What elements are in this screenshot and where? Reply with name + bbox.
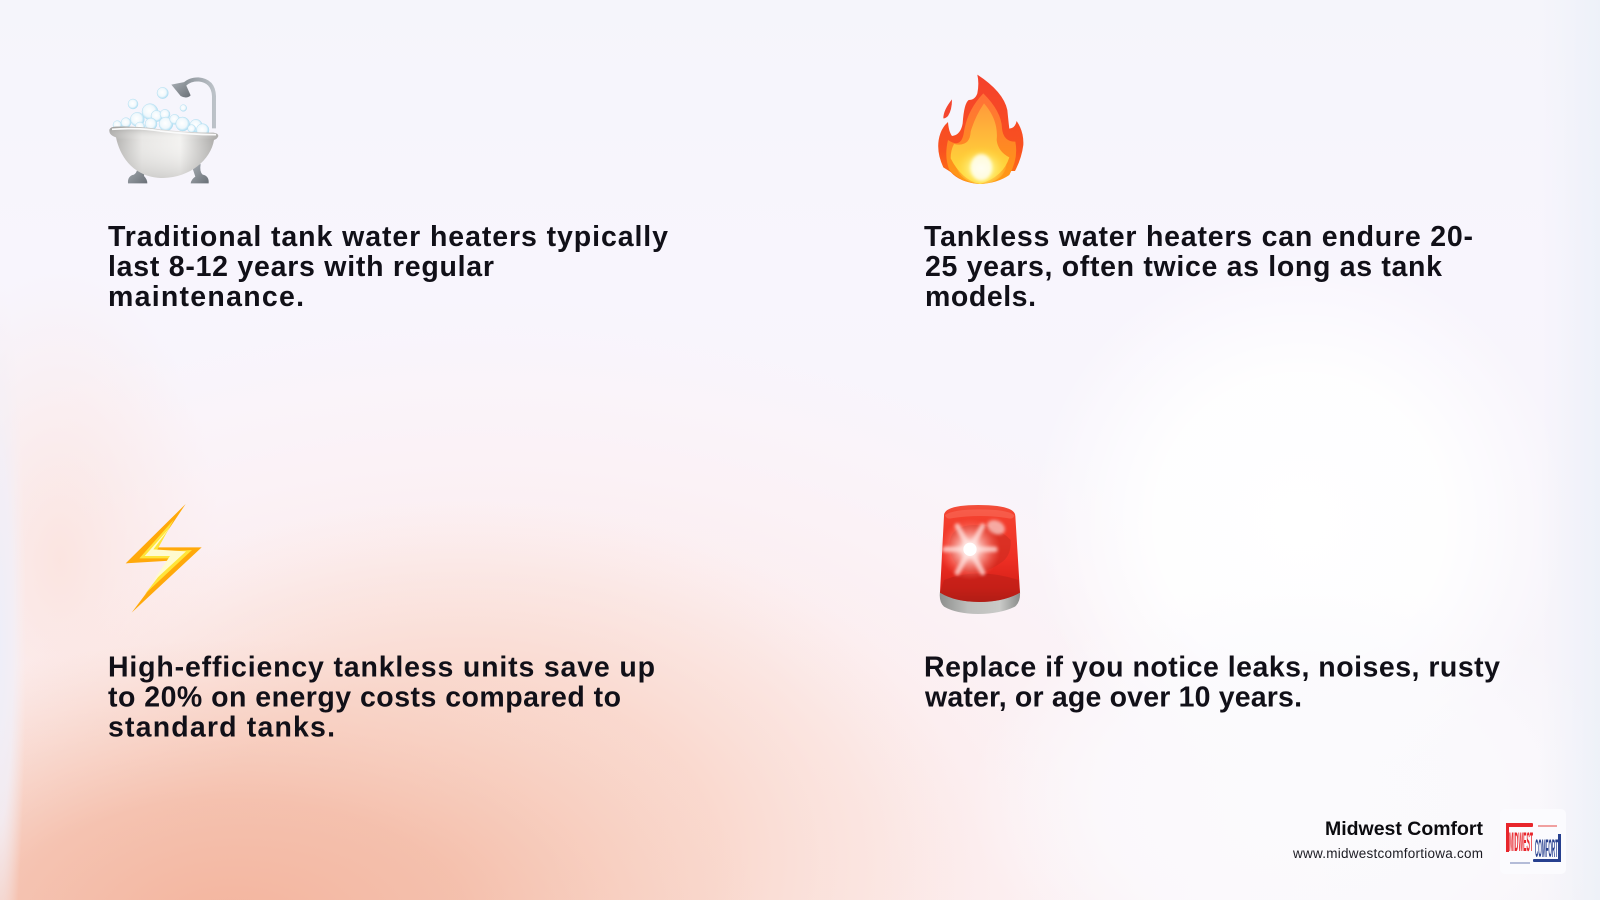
icon: bathtub: [109, 79, 218, 183]
fact text: energy savings: to 20% on energy costs compared to: [108, 682, 621, 714]
fact text: replacement signs: Replace if you notice leaks, noises, rusty: [924, 652, 1500, 684]
panel: replacement signs: [924, 505, 1500, 714]
brand name: Midwest Comfort: [1325, 818, 1483, 840]
icon: lightning bolt: [126, 504, 202, 613]
panel: tank lifespan: [108, 79, 668, 313]
fact text: tank lifespan: maintenance.: [108, 281, 304, 313]
panel: energy savings: [108, 504, 655, 744]
icon: red siren: [939, 505, 1020, 614]
branding footer: [1292, 809, 1566, 874]
fact text: energy savings: standard tanks.: [108, 712, 335, 744]
fact text: tankless lifespan: Tankless water heaters can endure 20-: [924, 221, 1473, 253]
fact text: tank lifespan: last 8-12 years with regular: [108, 251, 494, 283]
fact text: tankless lifespan: models.: [925, 281, 1036, 313]
fact text: tankless lifespan: 25 years, often twice as long as tank: [925, 251, 1442, 283]
icon: flame: [938, 75, 1023, 184]
logo badge: [1500, 809, 1566, 874]
fact text: energy savings: High-efficiency tankless units save up: [108, 652, 655, 684]
website url: www.midwestcomfortiowa.com: [1292, 846, 1483, 861]
fact text: replacement signs: water, or age over 10 years.: [924, 682, 1302, 714]
fact text: tank lifespan: Traditional tank water heaters typically: [108, 221, 668, 253]
panel: tankless lifespan: [924, 75, 1473, 313]
